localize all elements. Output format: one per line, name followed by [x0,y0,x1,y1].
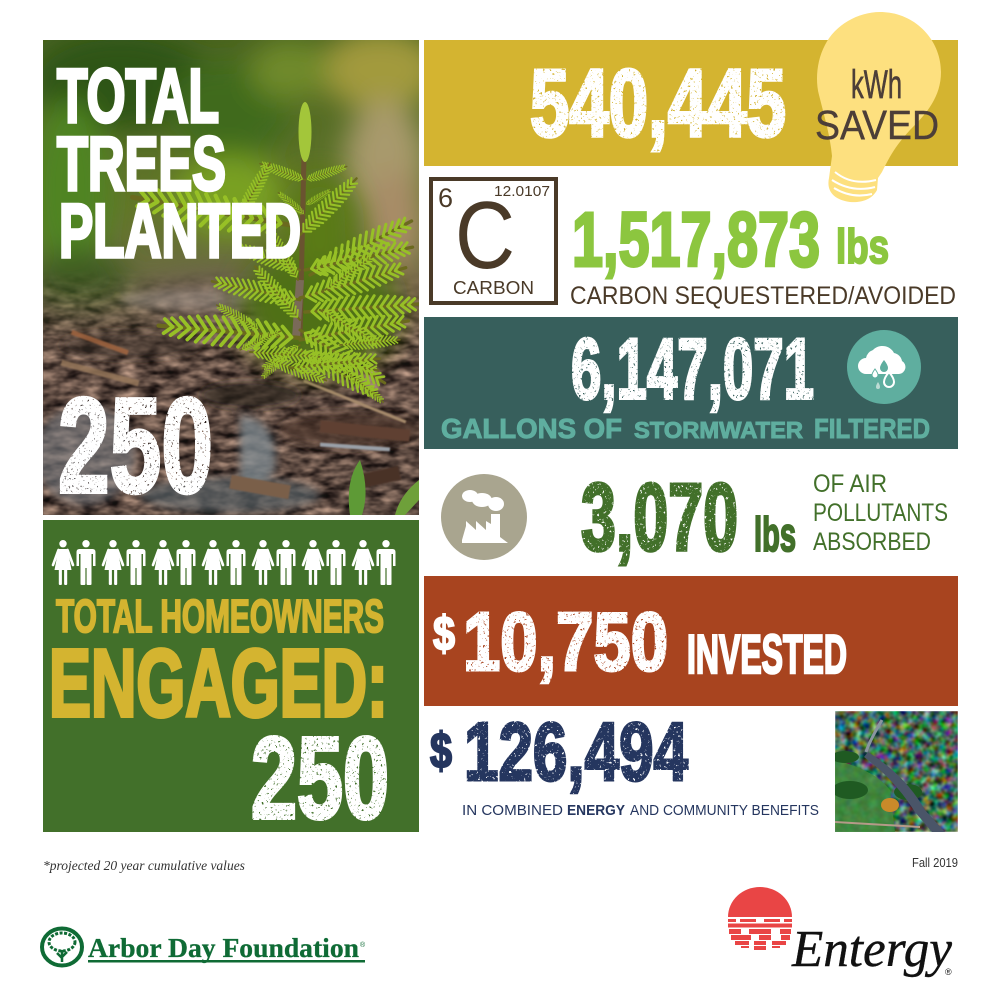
stat: 1,517,873 lbs: lbs [836,221,889,274]
panel: total trees planted photo [43,40,419,515]
stat: $126,494: 126,494 [464,705,688,798]
panel: community benefits [430,705,958,832]
date label: Fall 2019 [912,856,958,870]
label: combined energy and community benefits: ENERGY [567,802,625,819]
panel: dollars invested [424,576,958,706]
label: gallons of stormwater filtered [441,413,930,444]
panel: homeowners engaged [43,520,419,843]
stat: $10,750 invested [433,595,847,688]
label: gallons of stormwater filtered: FILTERED [814,413,930,444]
heading: engaged: ENGAGED: [49,630,388,737]
icon: light bulb [817,12,941,202]
panel: air pollutants absorbed [441,464,948,571]
stat: 540,445: 540,445 [530,50,786,157]
icon: factory [441,474,527,560]
stat: 250 trees: 250 [58,370,213,521]
seedling tree [130,102,421,406]
label: combined energy and community benefits [462,802,819,819]
label: of air pollutants absorbed: OF AIR [813,470,887,498]
logo: Entergy: Entergy [791,921,953,978]
icon: carbon periodic table tile: C [455,182,515,289]
label: carbon sequestered/avoided: CARBON SEQUESTERED/AVOIDED [570,282,956,310]
stat: $10,750 invested: 10,750 [463,595,668,688]
stat: $10,750 invested: $ [433,608,455,661]
icon row: homeowner figures [53,540,396,585]
heading: total trees planted [57,54,301,274]
heading: total homeowners: TOTAL HOMEOWNERS [56,590,384,642]
label: of air pollutants absorbed: POLLUTANTS [813,499,948,527]
label: gallons of stormwater filtered: STORMWATER [634,417,803,443]
heading: total trees planted: PLANTED [59,189,301,274]
stat: 3,070 lbs: lbs [754,509,796,562]
panel: stormwater filtered [424,317,958,449]
label: combined energy and community benefits: AND COMMUNITY BENEFITS [630,802,819,819]
icon: carbon periodic table tile [431,179,556,303]
panel: carbon sequestered [431,179,956,310]
photo: aerial neighbourhood [831,711,958,832]
label: combined energy and community benefits: IN COMBINED [462,802,563,819]
logo: Arbor Day Foundation [42,928,366,966]
panel: kWh saved [424,12,958,202]
stat: 1,517,873 lbs: 1,517,873 [572,197,820,283]
label: of air pollutants absorbed [813,470,948,556]
label: of air pollutants absorbed: ABSORBED [813,528,931,556]
logo: Arbor Day Foundation: ® [360,941,366,949]
logo: Entergy: ® [945,967,952,977]
icon: carbon periodic table tile: CARBON [453,277,534,298]
label: kWh saved: SAVED [815,102,939,148]
heading: total trees planted: TOTAL [57,54,219,139]
footnote: *projected 20 year cumulative values [43,858,245,873]
label: kWh saved [815,63,939,148]
label: gallons of stormwater filtered: GALLONS OF [441,413,622,444]
photo: spruce seedling in mulch [43,40,419,515]
icon: carbon periodic table tile: 6 [438,183,453,213]
label: kWh saved: kWh [851,63,902,107]
stat: $10,750 invested: INVESTED [687,623,847,685]
stat: $126,494: $ [430,723,452,779]
logo: Entergy [728,887,953,978]
heading: total trees planted: TREES [57,122,226,207]
stat: $126,494 [430,705,688,798]
icon: rain cloud [847,330,921,404]
logo: Arbor Day Foundation: Arbor Day Foundation [88,933,359,963]
icon: carbon periodic table tile: 12.0107 [494,184,550,200]
stat: 250 homeowners: 250 [251,713,389,843]
stat: 6,147,071: 6,147,071 [571,322,814,418]
stat: 3,070 lbs: 3,070 [581,464,738,571]
